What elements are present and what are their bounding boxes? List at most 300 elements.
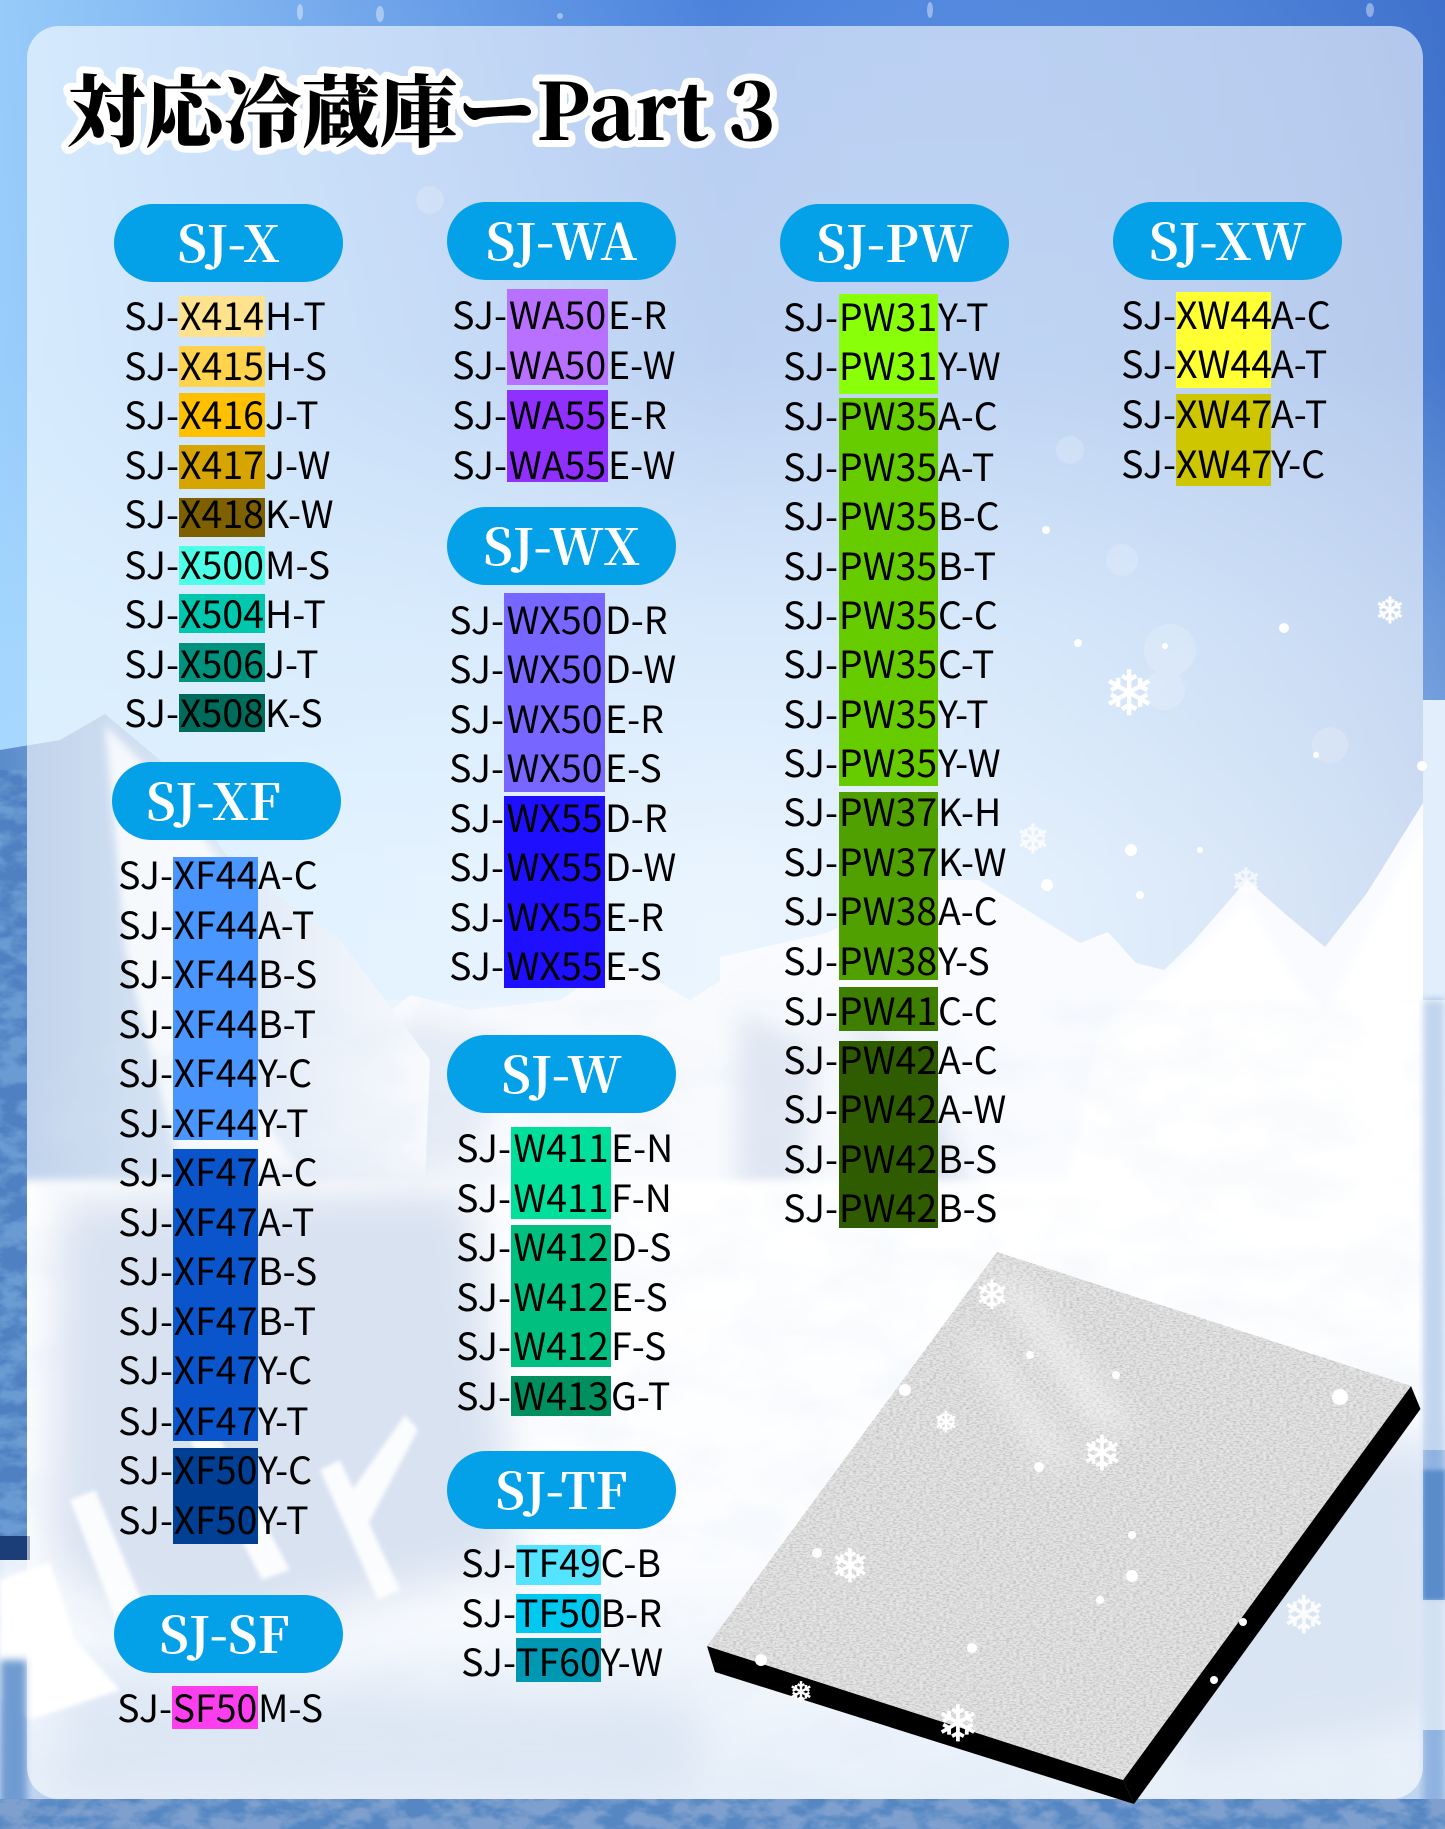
model: SJ-PW31Y-T: SJ- (783, 287, 838, 342)
model: SJ-X414H-T: SJ- (124, 286, 179, 341)
model: SJ-WX55D-W: WX55 (506, 837, 603, 892)
highlight: TF50 (516, 1594, 600, 1633)
highlight: XF47 (173, 1148, 258, 1441)
model: SJ-XF44Y-C (118, 1043, 312, 1098)
model: SJ-PW35Y-W: Y-W (938, 733, 1001, 788)
model: SJ-XW44A-T: SJ- (1121, 334, 1176, 389)
model: SJ-PW31Y-W: PW31 (839, 336, 937, 391)
model: SJ-PW35C-T: C-T (938, 634, 994, 689)
model: SJ-PW35B-T (780, 542, 996, 586)
model: SJ-XW47Y-C (1113, 440, 1325, 484)
model: SJ-PW42B-S (second entry): SJ- (783, 1178, 838, 1233)
model: SJ-XF50Y-C: Y-C (258, 1440, 312, 1495)
model: SJ-XF47A-C: XF47 (174, 1142, 257, 1197)
model: SJ-PW37K-H: SJ- (783, 782, 838, 837)
model: SJ-TF49C-B: C-B (600, 1533, 661, 1588)
highlight: PW41 (839, 987, 938, 1031)
model: SJ-PW31Y-W (780, 342, 1001, 386)
model: SJ-XF44B-T: SJ- (118, 994, 173, 1049)
snow field (0, 1180, 1445, 1829)
model: SJ-WX55D-R: WX55 (506, 788, 603, 843)
section: SJ-X (114, 204, 343, 738)
model: SJ-PW35Y-W: SJ- (783, 733, 838, 788)
model: SJ-W411F-N (447, 1174, 672, 1218)
model: SJ-PW35B-C: B-C (938, 486, 1000, 540)
model: SJ-X414H-T: X414 (180, 286, 264, 341)
pill heading: SJ-WX: SJ-WX (483, 508, 640, 580)
snowflakes over the scene: ❄ (1223, 1174, 1257, 1220)
far ridge right (720, 775, 1445, 1829)
model: SJ-PW35A-C: PW35 (839, 386, 937, 441)
model: SJ-W412F-S: SJ- (456, 1316, 511, 1371)
model: SJ-XF47Y-T: XF47 (174, 1391, 257, 1446)
model: SJ-XW44A-T: A-T (1271, 334, 1327, 389)
model: SJ-X414H-T: H-T (265, 286, 326, 341)
model: SJ-PW31Y-W: SJ- (783, 336, 838, 391)
model: SJ-PW42A-C (780, 1036, 998, 1080)
model: SJ-W411F-N: SJ- (456, 1168, 511, 1223)
model: SJ-PW35A-T: PW35 (839, 437, 937, 492)
model: SJ-WA55E-R (452, 385, 667, 440)
highlight: X500 (179, 546, 265, 585)
model: SJ-X506J-T (124, 634, 319, 689)
model: SJ-X500M-S: M-S (265, 534, 330, 590)
model: SJ-WX55D-R (449, 788, 668, 843)
model: SJ-PW35B-T: PW35 (839, 536, 937, 591)
section: SJ-WX (447, 507, 676, 991)
model: SJ-X504H-T: X504 (180, 584, 264, 638)
model: SJ-XF44Y-T: Y-T (258, 1093, 309, 1148)
model: SJ-XF44A-C: XF44 (174, 845, 257, 900)
model: SJ-WX50E-S (449, 738, 662, 793)
model: SJ-X417J-W: J-W (265, 435, 331, 490)
model: SJ-PW35C-T: PW35 (839, 634, 937, 689)
model: SJ-W412F-S: F-S (611, 1316, 666, 1371)
model: SJ-WX50E-R: E-R (605, 689, 664, 744)
model: SJ-TF50B-R: B-R (600, 1583, 662, 1638)
model: SJ-WA55E-W: WA55 (509, 435, 606, 490)
model: SJ-PW42A-W: A-W (938, 1079, 1006, 1134)
model: SJ-PW35C-C: C-C (938, 585, 998, 640)
model: SJ-XF47Y-C: Y-C (258, 1340, 312, 1395)
model: SJ-PW38Y-S: PW38 (839, 931, 937, 986)
model: SJ-W411E-N: SJ- (456, 1118, 511, 1173)
model: SJ-X506J-T: SJ- (124, 634, 179, 689)
model: SJ-XF44A-C: SJ- (118, 845, 173, 900)
left strip (0, 770, 27, 1540)
highlight: XF50 (173, 1448, 258, 1544)
section: SJ-XW (1113, 202, 1342, 486)
model: SJ-XF47B-T: B-T (258, 1291, 316, 1346)
model: SJ-W411F-N: W411 (513, 1168, 609, 1223)
highlight: PW42 (839, 1041, 938, 1228)
model: SJ-PW35C-T: SJ- (783, 634, 838, 689)
model: SJ-TF49C-B: SJ- (461, 1533, 516, 1588)
model: SJ-X500M-S: SJ- (124, 534, 179, 590)
highlight: X414 (179, 296, 265, 337)
model: SJ-PW42B-S: PW42 (839, 1129, 937, 1184)
model: SJ-XF47Y-T: Y-T (258, 1391, 309, 1446)
model: SJ-PW42B-S (780, 1135, 997, 1179)
model: SJ-X508K-S: K-S (265, 683, 323, 738)
model: SJ-WX50E-S: SJ- (449, 738, 504, 793)
model: SJ-TF49C-B (447, 1539, 661, 1583)
model: SJ-PW35Y-T (780, 690, 989, 734)
section: SJ-PW (780, 204, 1009, 1228)
model: SJ-XF47A-T: SJ- (118, 1192, 173, 1247)
model: SJ-XF44A-C (118, 845, 318, 900)
model: SJ-X417J-W (124, 435, 331, 490)
snowflakes over the scene: ❄ (937, 1695, 979, 1753)
model: SJ-PW31Y-T: Y-T (938, 287, 989, 342)
highlight: WA55 (507, 390, 608, 482)
model: SJ-X417J-W: X417 (180, 435, 264, 490)
pill heading: SJ-WX (447, 507, 676, 585)
model: SJ-XW44A-C: SJ- (1121, 285, 1176, 340)
model: SJ-PW35C-T (780, 640, 994, 684)
model: SJ-PW37K-W: PW37 (839, 832, 937, 887)
model: SJ-TF50B-R (447, 1589, 662, 1633)
model: SJ-W412F-S (447, 1322, 666, 1366)
model: SJ-PW35A-C (780, 392, 998, 436)
model: SJ-WA50E-W (452, 335, 676, 390)
model: SJ-XF44B-T: B-T (258, 994, 316, 1049)
model: SJ-PW31Y-T: PW31 (839, 287, 937, 342)
model: SJ-WA50E-R: SJ- (452, 285, 507, 340)
model: SJ-WX50D-W: SJ- (449, 639, 504, 694)
model: SJ-X418K-W (124, 484, 334, 539)
model: SJ-PW35A-T: SJ- (783, 437, 838, 492)
model: SJ-XF44Y-T: SJ- (118, 1093, 173, 1148)
model: SJ-WX50D-W: D-W (605, 639, 676, 694)
model: SJ-WX55E-R (447, 893, 664, 937)
snowflakes over the scene: ❄ (1016, 817, 1050, 863)
highlight: WX50 (504, 593, 605, 792)
model: SJ-XF47A-T: A-T (258, 1192, 314, 1247)
model: SJ-WA50E-R: E-R (608, 285, 667, 340)
model: SJ-XF47B-T (118, 1291, 316, 1346)
highlight: PW37 and PW38 (839, 792, 938, 980)
model: SJ-X506J-T: J-T (265, 634, 319, 689)
model: SJ-X416J-T: X416 (180, 385, 264, 440)
model: SJ-XF44B-T (118, 994, 316, 1049)
model: SJ-X506J-T: X506 (180, 634, 264, 689)
model: SJ-WA55E-R: E-R (608, 385, 667, 440)
model: SJ-PW38A-C: SJ- (783, 881, 838, 936)
model: SJ-TF60Y-W: TF60 (516, 1632, 601, 1687)
highlight: X508 (179, 694, 265, 732)
model: SJ-XF44B-T: XF44 (174, 994, 257, 1049)
highlight: WA50 (507, 289, 608, 385)
snowflakes over the scene: ❄ (1375, 591, 1405, 632)
pill heading: SJ-XW: SJ-XW (1149, 203, 1306, 275)
model: SJ-WA50E-W: WA50 (509, 335, 606, 390)
pill heading: SJ-XW (1113, 202, 1342, 280)
model: SJ-XW44A-T (1113, 340, 1327, 384)
model: SJ-W413G-T: G-T (611, 1366, 670, 1421)
pill heading: SJ-WA: SJ-WA (486, 203, 637, 275)
pill heading: SJ-WA (447, 202, 676, 280)
model: SJ-PW37K-W: K-W (938, 832, 1007, 887)
model: SJ-WX55E-R: WX55 (506, 887, 603, 942)
snowflakes over the scene: ❄ (1082, 1426, 1122, 1482)
model: SJ-W413G-T: W413 (513, 1366, 609, 1421)
model: SJ-XF50Y-C: XF50 (174, 1440, 257, 1495)
model: SJ-XF47B-S: XF47 (174, 1241, 257, 1296)
highlight: W413 (511, 1376, 611, 1416)
model: SJ-WX55D-R: SJ- (449, 788, 504, 843)
model: SJ-XF44A-T: XF44 (174, 895, 257, 950)
model: SJ-PW35B-T: SJ- (783, 536, 838, 591)
model: SJ-TF50B-R: SJ- (461, 1583, 516, 1638)
model: SJ-PW35B-C: PW35 (839, 486, 937, 540)
model: SJ-WA50E-R (452, 285, 667, 340)
model: SJ-WA50E-W: SJ- (452, 335, 507, 390)
model: SJ-WX55D-W (449, 837, 676, 892)
model: SJ-XW47Y-C: Y-C (1271, 434, 1325, 489)
model: SJ-PW35Y-T: PW35 (839, 684, 937, 739)
model: SJ-PW42A-C: SJ- (783, 1030, 838, 1085)
model: SJ-XF47Y-T (118, 1391, 309, 1446)
model: SJ-WA50E-W: E-W (608, 335, 676, 390)
model: SJ-PW42B-S (second entry): B-S (938, 1178, 997, 1233)
model: SJ-XF44A-T: SJ- (118, 895, 173, 950)
snowflakes over the scene: ❄ (1103, 657, 1155, 730)
model: SJ-PW35B-T: B-T (938, 536, 996, 591)
model: SJ-W412D-S: SJ- (456, 1217, 511, 1272)
snowflakes over the scene: ❄ (831, 1539, 869, 1593)
model: SJ-X417J-W: SJ- (124, 435, 179, 490)
model: SJ-XF44B-S (118, 944, 317, 999)
model: SJ-X415H-S: H-S (265, 336, 327, 391)
model: SJ-TF50B-R: TF50 (516, 1583, 601, 1638)
model: SJ-WX50D-W (449, 639, 676, 694)
model: SJ-WA55E-W: SJ- (452, 435, 507, 490)
model: SJ-XF50Y-T: Y-T (258, 1490, 309, 1545)
model: SJ-XW44A-T: XW44 (1176, 334, 1272, 389)
highlight: X418 (179, 498, 265, 536)
title: 対応冷蔵庫ーPart 3 (67, 51, 776, 163)
model: SJ-W413G-T: SJ- (456, 1366, 511, 1421)
section: SJ-TF (447, 1451, 676, 1682)
model: SJ-PW38A-C: PW38 (839, 881, 937, 936)
model: SJ-PW37K-W (780, 838, 1007, 882)
model: SJ-PW42A-W: PW42 (839, 1079, 937, 1134)
pill heading: SJ-SF: SJ-SF (159, 1596, 290, 1668)
pill heading: SJ-X (114, 204, 343, 282)
model: SJ-X415H-S: X415 (180, 336, 264, 391)
highlight: W412 (511, 1225, 611, 1367)
pill heading: SJ-X: SJ-X (177, 205, 280, 277)
model: SJ-XW47A-T (1113, 390, 1327, 434)
model: SJ-WX50E-S: WX50 (506, 738, 603, 793)
model: SJ-XF44Y-C: Y-C (258, 1043, 312, 1098)
model: SJ-WX55E-S: WX55 (506, 936, 603, 991)
model: SJ-WX50D-W: WX50 (506, 639, 603, 694)
model: SJ-X504H-T: H-T (265, 584, 326, 638)
model: SJ-PW42B-S (second entry): PW42 (839, 1178, 937, 1233)
model: SJ-X500M-S: X500 (180, 534, 264, 590)
highlight: TF49 (516, 1545, 600, 1585)
model: SJ-XF47B-T: XF47 (174, 1291, 257, 1346)
pill heading: SJ-SF (114, 1595, 343, 1673)
model: SJ-W412D-S: D-S (611, 1217, 671, 1272)
model: SJ-XF47B-S: B-S (258, 1241, 317, 1296)
model: SJ-XF50Y-T (118, 1490, 309, 1545)
model: SJ-TF60Y-W (447, 1638, 663, 1682)
model: SJ-W411E-N (447, 1124, 673, 1168)
model: SJ-XW47A-T: XW47 (1176, 384, 1272, 439)
model: SJ-WX50D-R (449, 590, 668, 645)
model: SJ-W412D-S: W412 (513, 1217, 609, 1272)
model: SJ-WX50D-R: D-R (605, 590, 668, 645)
model: SJ-PW35Y-T: Y-T (938, 684, 989, 739)
ice crystals (70, 1415, 418, 1630)
highlight: XW44 (1176, 292, 1271, 388)
model: SJ-WX50D-R: SJ- (449, 590, 504, 645)
model: SJ-XW47A-T: A-T (1271, 384, 1327, 439)
model: SJ-XF44A-T: A-T (258, 895, 314, 950)
model: SJ-PW41C-C: SJ- (783, 981, 838, 1036)
model: SJ-SF50M-S: SF50 (173, 1678, 257, 1733)
highlight: WX55 (504, 796, 605, 988)
snowflakes over the scene: ❄ (1282, 1586, 1326, 1646)
model: SJ-PW35Y-T: SJ- (783, 684, 838, 739)
pill heading: SJ-XF (112, 762, 341, 840)
model: SJ-PW35Y-W: PW35 (839, 733, 937, 788)
model: SJ-PW35A-T (780, 443, 994, 487)
model: SJ-XF44Y-T: XF44 (174, 1093, 257, 1148)
model: SJ-XF47A-T (118, 1192, 314, 1247)
model: SJ-XF47Y-C: SJ- (118, 1340, 173, 1395)
section: SJ-WA (447, 202, 676, 490)
product image: filter pad (707, 1252, 1420, 1804)
model: SJ-XF50Y-C: SJ- (118, 1440, 173, 1495)
model: SJ-XF47A-C: A-C (258, 1142, 318, 1197)
model: SJ-X414H-T (124, 286, 326, 341)
highlight: XW47 (1176, 394, 1271, 486)
model: SJ-W413G-T (447, 1372, 670, 1416)
model: SJ-X504H-T (124, 584, 326, 638)
pill heading: SJ-TF: SJ-TF (495, 1452, 628, 1524)
model: SJ-WX50D-R: WX50 (506, 590, 603, 645)
highlight: X504 (179, 594, 265, 633)
highlight: X416 (179, 393, 265, 437)
model: SJ-X416J-T: SJ- (124, 385, 179, 440)
model: SJ-PW35C-C (780, 591, 998, 635)
model: SJ-XF47B-S (118, 1241, 317, 1296)
highlight: W411 (511, 1126, 611, 1218)
model: SJ-WX50E-R (449, 689, 664, 744)
model: SJ-SF50M-S (117, 1678, 323, 1733)
model: SJ-X415H-S: SJ- (124, 336, 179, 391)
model: SJ-XF47Y-C (118, 1340, 312, 1395)
model: SJ-PW35B-C: SJ- (783, 486, 838, 540)
model: SJ-WX55D-W: SJ- (449, 837, 504, 892)
model: SJ-XF50Y-C (118, 1440, 312, 1495)
section: SJ-SF (114, 1595, 343, 1733)
model: SJ-PW38Y-S: SJ- (783, 931, 838, 986)
model: SJ-XW44A-C: A-C (1271, 285, 1331, 340)
model: SJ-XF44B-S: B-S (258, 944, 317, 999)
model: SJ-WX55E-S: E-S (605, 936, 662, 991)
model: SJ-PW41C-C: PW41 (839, 981, 937, 1036)
snowflakes over the scene: ❄ (789, 1676, 813, 1709)
model: SJ-X508K-S: X508 (180, 683, 264, 738)
model: SJ-WX55E-R: E-R (605, 887, 664, 942)
bottom ice band (0, 1799, 1445, 1829)
model: SJ-WX50E-S: E-S (605, 738, 662, 793)
model: SJ-XF50Y-T: XF50 (174, 1490, 257, 1545)
right side strip (1423, 700, 1445, 1000)
model: SJ-W412D-S (447, 1223, 671, 1267)
pill heading: SJ-TF (447, 1451, 676, 1529)
model: SJ-WX55E-S: SJ- (449, 936, 504, 991)
model: SJ-WX55D-W: D-W (605, 837, 676, 892)
highlight: SF50 (172, 1686, 258, 1729)
model: SJ-X418K-W: SJ- (124, 484, 179, 539)
model: SJ-PW35B-C (780, 492, 1000, 536)
model: SJ-XF44A-C: A-C (258, 845, 318, 900)
snowflakes over the scene: ❄ (934, 1406, 958, 1439)
model: SJ-PW41C-C (780, 987, 998, 1031)
model: SJ-X416J-T: J-T (265, 385, 319, 440)
highlight: PW31 (839, 294, 938, 394)
pill heading: SJ-W: SJ-W (501, 1036, 622, 1108)
model: SJ-XW47A-T: SJ- (1121, 384, 1176, 439)
model: SJ-XF50Y-T: SJ- (118, 1490, 173, 1545)
model: SJ-PW38A-C (780, 887, 998, 931)
highlight: X417 (179, 445, 265, 489)
model: SJ-W411F-N: F-N (611, 1168, 672, 1223)
model: SJ-PW42A-W (780, 1085, 1006, 1129)
model: SJ-PW37K-W: SJ- (783, 832, 838, 887)
model: SJ-PW37K-H (780, 788, 1001, 832)
model: SJ-WX55E-S (447, 942, 662, 986)
model: SJ-PW35A-T: A-T (938, 437, 994, 492)
model: SJ-XF44Y-C: XF44 (174, 1043, 257, 1098)
model: SJ-XF47B-S: SJ- (118, 1241, 173, 1296)
model: SJ-SF50M-S: M-S (258, 1678, 323, 1733)
highlight: X506 (179, 643, 265, 682)
model: SJ-PW42B-S (second entry) (780, 1184, 997, 1228)
model: SJ-XW44A-C (1113, 291, 1331, 335)
model: SJ-XW44A-C: XW44 (1176, 285, 1272, 340)
model: SJ-PW42A-C: A-C (938, 1030, 998, 1085)
model: SJ-WX55E-R: SJ- (449, 887, 504, 942)
model: SJ-XF47A-C (118, 1142, 318, 1197)
model: SJ-PW41C-C: C-C (938, 981, 998, 1036)
model: SJ-X416J-T (124, 385, 319, 440)
pill heading: SJ-XF: SJ-XF (146, 763, 281, 835)
model: SJ-PW35C-C: SJ- (783, 585, 838, 640)
model: SJ-PW38Y-S: Y-S (938, 931, 990, 986)
model: SJ-XF47A-C: SJ- (118, 1142, 173, 1197)
left mountain (0, 714, 430, 1300)
highlight: TF60 (516, 1638, 600, 1682)
centre mountain (330, 955, 1000, 1500)
model: SJ-XW47Y-C: SJ- (1121, 434, 1176, 489)
model: SJ-PW38Y-S (780, 937, 990, 981)
highlight: X415 (179, 346, 265, 387)
model: SJ-W412E-S: W412 (513, 1267, 609, 1322)
model: SJ-PW31Y-W: Y-W (938, 336, 1001, 391)
pill heading: SJ-PW (780, 204, 1009, 282)
model: SJ-W411E-N: W411 (513, 1118, 609, 1173)
model: SJ-X508K-S: SJ- (124, 683, 179, 738)
model: SJ-XF44B-S: XF44 (174, 944, 257, 999)
model: SJ-XF44B-S: SJ- (118, 944, 173, 999)
